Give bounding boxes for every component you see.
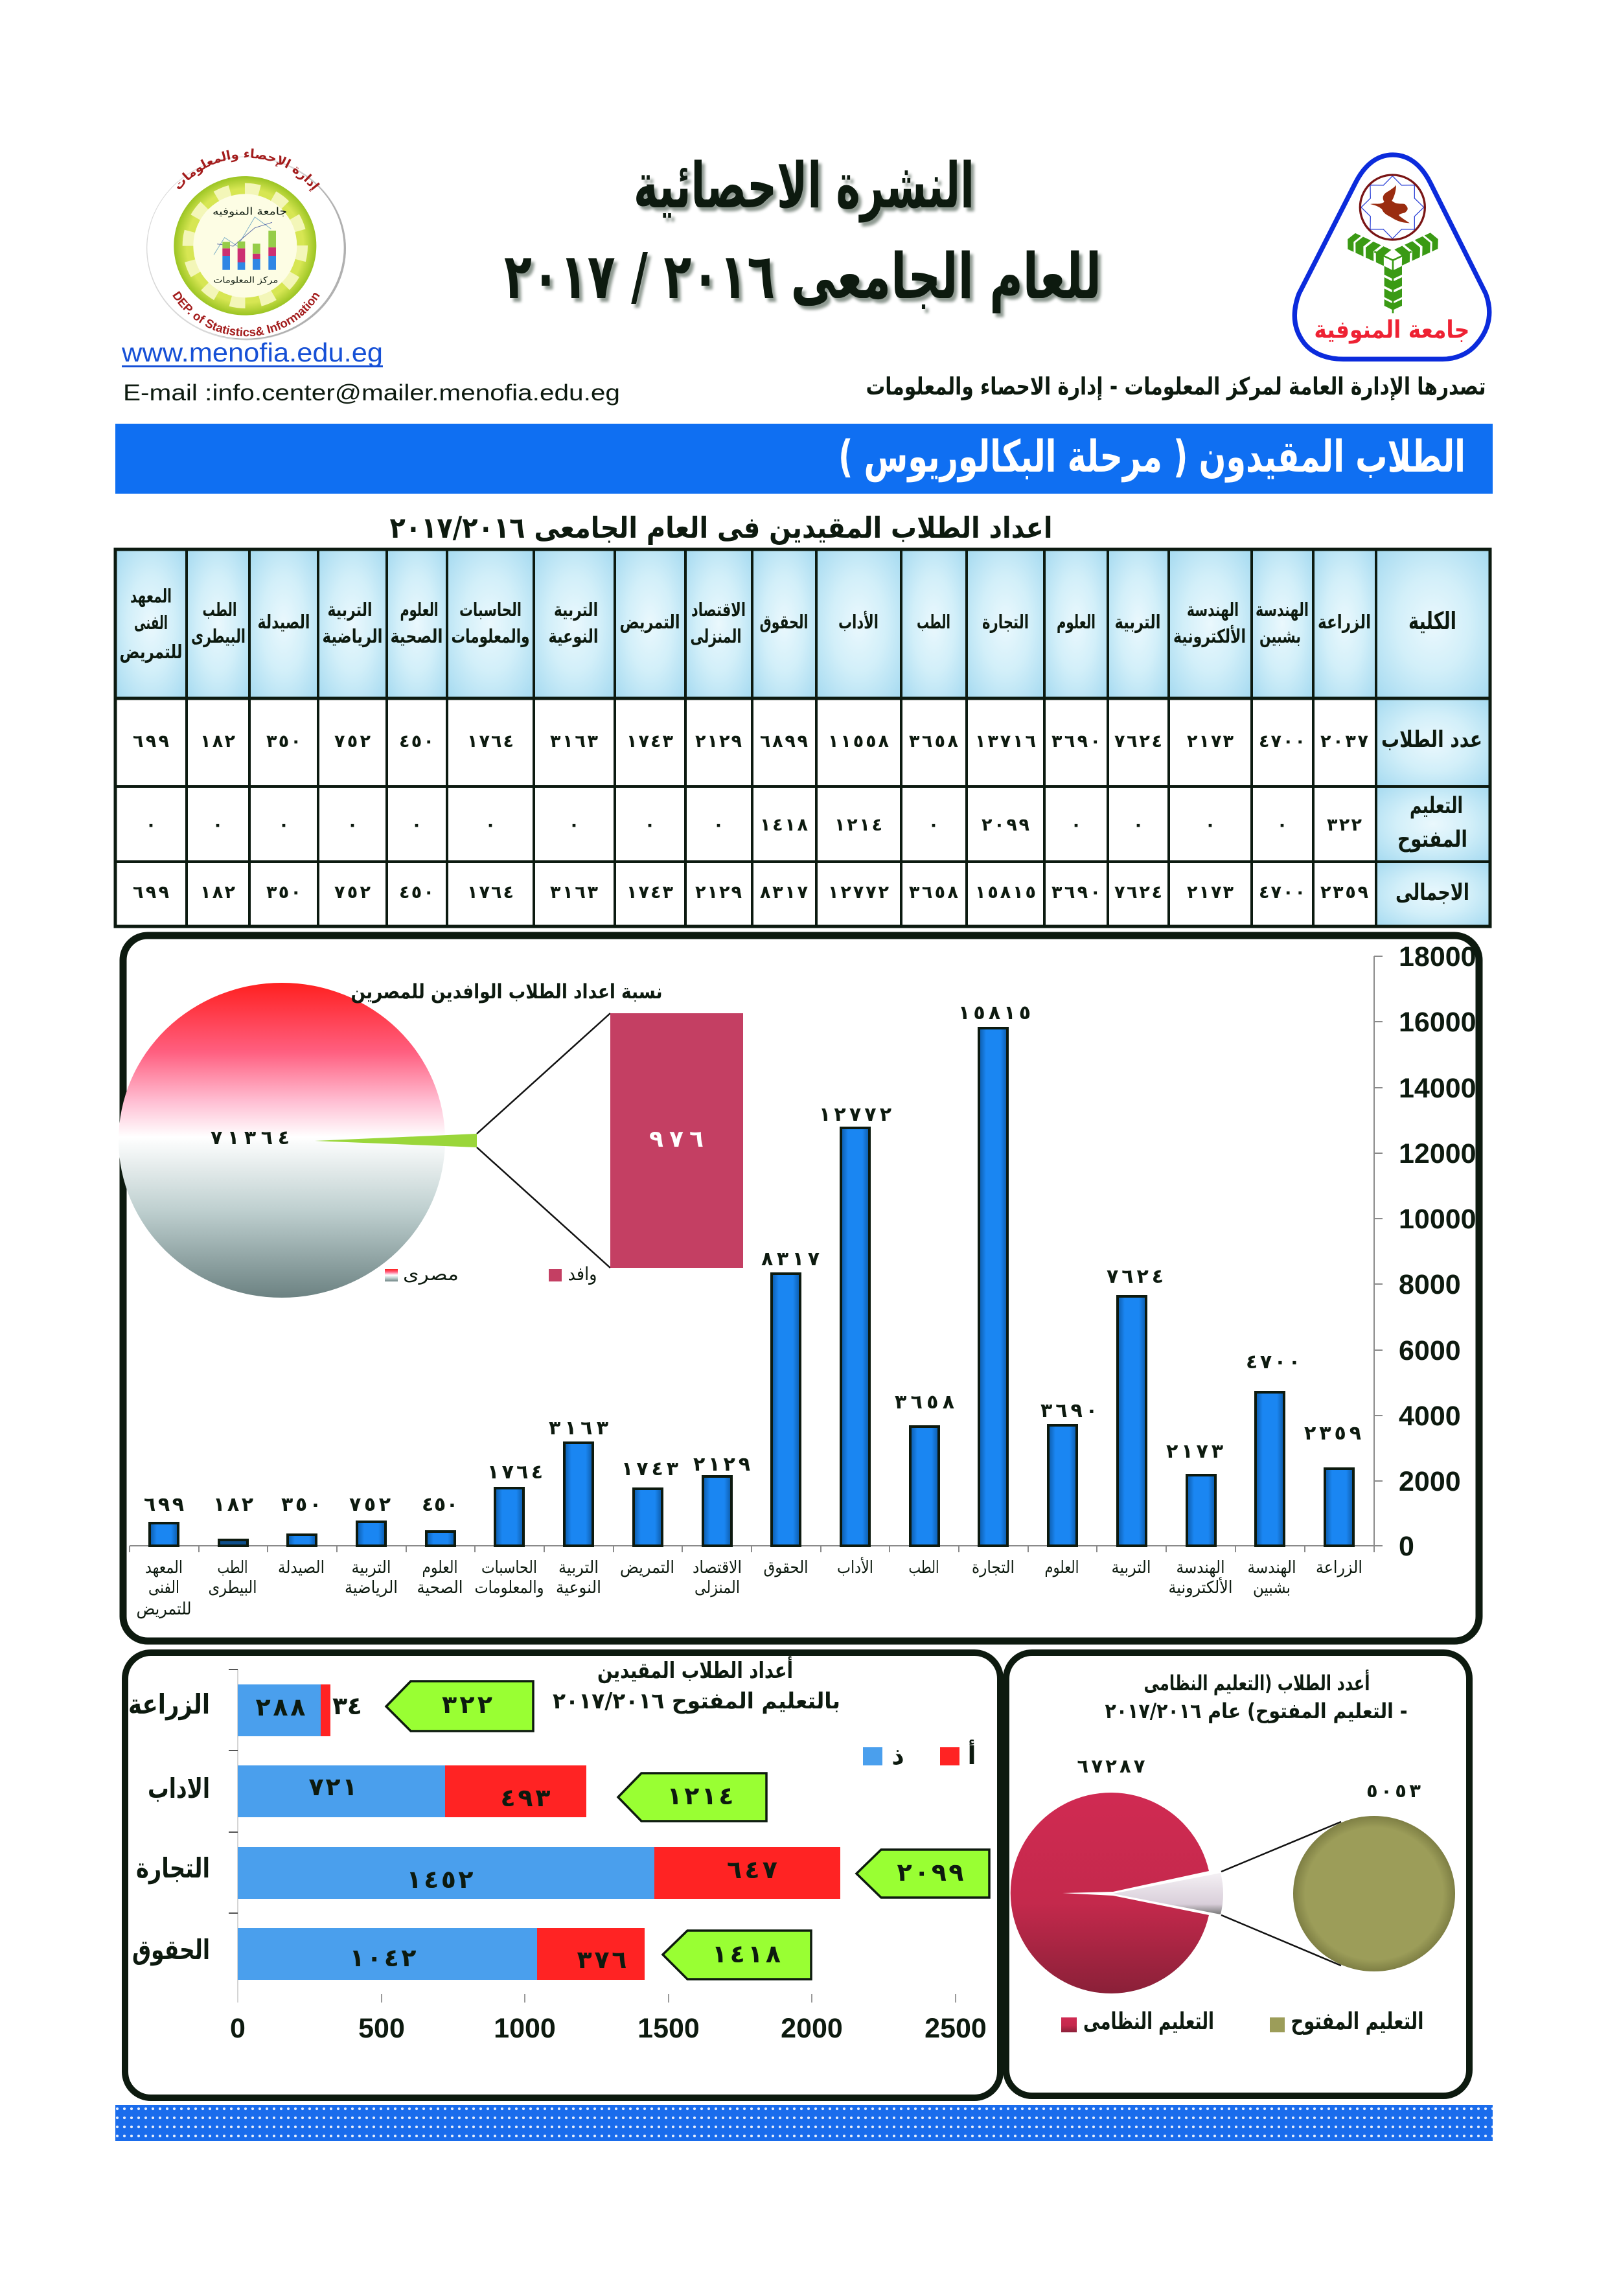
pie legend: التعليم المفتوح	[1291, 2008, 1424, 2035]
table row: regular students: ٣٦٩٠	[1051, 731, 1101, 752]
table row: regular students: ١٧٦٤	[467, 731, 514, 752]
x axis labels: 500	[358, 2013, 405, 2044]
table: enrolled students by faculty	[115, 549, 1490, 926]
bar chart: total by faculty	[130, 941, 1476, 1619]
y axis labels: 14000	[1399, 1073, 1476, 1104]
bar value labels: ٣٥٠	[281, 1493, 321, 1516]
faculty row labels: التجارة	[136, 1852, 210, 1884]
panel: total students bar chart and foreign students pie	[119, 936, 1479, 1641]
callout values: ٢٠٩٩	[897, 1858, 964, 1887]
logo: Menofia University emblem	[1294, 155, 1489, 359]
pie of pie chart: ٦٧٢٨٧	[1077, 1755, 1145, 1777]
table header labels: التجارة	[982, 611, 1029, 633]
table header labels: الصيدلة	[258, 611, 310, 633]
table row: totals: ٧٦٢٤	[1114, 882, 1162, 902]
table header labels: العلوم	[1057, 611, 1096, 633]
table row: regular students: ١٣٧١٦	[975, 731, 1036, 752]
x axis category labels: الصيدلة	[278, 1558, 325, 1578]
bar value labels: ٧٥٢	[349, 1493, 391, 1516]
bar value labels: ٤٥٠	[422, 1493, 458, 1516]
y axis labels	[1399, 941, 1476, 1562]
y axis labels: 6000	[1399, 1335, 1461, 1366]
x axis category labels: المنزلى	[695, 1578, 740, 1598]
x axis category labels: الهندسة	[1248, 1558, 1296, 1578]
x axis category labels: الحاسبات	[481, 1558, 537, 1578]
table row: totals	[133, 882, 1368, 902]
table row labels: التعليم	[1410, 793, 1463, 819]
faculty row labels: الاداب	[148, 1773, 210, 1804]
table row: regular students: ٦٨٩٩	[760, 731, 808, 752]
panel: open education stacked bars	[125, 1653, 1000, 2098]
table title: اعداد الطلاب المقيدين فى العام الجامعى ٢٠١٧/٢٠١٦	[390, 511, 1052, 545]
table row: open education: ١٤١٨	[760, 815, 809, 835]
pie chart: Egyptian vs foreign students: ٩٧٦	[649, 1126, 704, 1153]
logo: statistics department seal: DEP. of Statistics& Information	[172, 291, 320, 337]
table row: totals: ٣٦٥٨	[909, 882, 959, 902]
bar value labels: ٣١٦٣	[549, 1417, 608, 1440]
table row: regular students: ٤٥٠	[399, 731, 434, 752]
table row: regular students: ١٧٤٣	[626, 731, 674, 752]
table header labels: الكلية	[1408, 607, 1456, 635]
stacked bars	[238, 1684, 840, 1980]
table row: totals: ٢٣٥٩	[1320, 882, 1368, 902]
table header labels: التربية	[554, 599, 598, 621]
table row: totals: ٣٦٩٠	[1051, 882, 1101, 902]
table row: totals: ١٧٦٤	[467, 882, 514, 902]
table row: open education: ٠	[713, 815, 724, 835]
pie legend: وافد	[568, 1263, 597, 1285]
table header labels: التمريض	[619, 611, 680, 633]
x axis category labels: الزراعة	[1316, 1558, 1362, 1578]
pie of pie chart	[1011, 1755, 1455, 1993]
y axis labels: 16000	[1399, 1007, 1476, 1038]
x axis category labels: التربية	[1112, 1558, 1151, 1578]
table row labels: الاجمالى	[1396, 880, 1469, 906]
y axis labels: 0	[1399, 1531, 1414, 1562]
table row: open education: ٠	[1133, 815, 1143, 835]
x axis category labels: بشبين	[1253, 1578, 1291, 1598]
bar value labels: ٣٦٩٠	[1040, 1399, 1097, 1422]
y axis labels: 10000	[1399, 1204, 1476, 1235]
x axis category labels: الرياضية	[345, 1578, 398, 1598]
pie title: نسبة اعداد الطلاب الوافدين للمصرين	[351, 980, 662, 1004]
x axis category labels: التربية	[351, 1558, 391, 1578]
total callouts	[386, 1681, 989, 1979]
table header labels: العلوم	[400, 599, 438, 621]
x axis category labels: التربية	[558, 1558, 599, 1578]
table row: totals: ٣٥٠	[266, 882, 301, 902]
callout values	[442, 1690, 964, 1968]
table row: open education: ٠	[485, 815, 496, 835]
table row: open education: ٠	[928, 815, 939, 835]
table row: open education: ٠	[212, 815, 223, 835]
table header labels: الهندسة	[1187, 599, 1239, 621]
stacked bar value labels: ٣٤	[332, 1692, 362, 1720]
x axis labels: 1500	[637, 2013, 700, 2044]
table row: open education: ٠	[1277, 815, 1287, 835]
faculty row labels: الحقوق	[132, 1934, 210, 1966]
table header labels: والمعلومات	[451, 625, 530, 647]
table header labels: الأداب	[838, 610, 879, 633]
axes	[229, 1670, 956, 2003]
stacked bar value labels: ٧٢١	[308, 1773, 358, 1801]
stacked bar value labels: ٣٧٦	[577, 1946, 627, 1974]
table header labels: الرياضية	[323, 625, 382, 647]
pie legend	[385, 1263, 597, 1285]
x axis category labels: النوعية	[556, 1578, 601, 1598]
x axis labels: 0	[230, 2013, 246, 2044]
table row: regular students: ١١٥٥٨	[828, 731, 890, 752]
x axis labels: 2500	[925, 2013, 987, 2044]
table row labels: المفتوح	[1397, 827, 1467, 853]
pie title: - التعليم المفتوح) عام ٢٠١٧/٢٠١٦	[1105, 1699, 1407, 1723]
table row labels: عدد الطلاب	[1381, 727, 1482, 753]
bar value labels: ٢١٧٣	[1166, 1440, 1223, 1463]
table row labels	[1381, 727, 1482, 906]
x axis labels: 2000	[781, 2013, 843, 2044]
table header labels: بشبين	[1259, 625, 1301, 647]
x axis category labels: الحقوق	[763, 1558, 809, 1578]
title: academic year: للعام الجامعى ٢٠١٦ / ٢٠١٧	[504, 240, 1101, 314]
logo: statistics department seal: جامعة المنوفيه	[212, 205, 287, 218]
table header labels: الهندسة	[1256, 599, 1309, 621]
title: bulletin name: النشرة الاحصائية	[634, 149, 974, 223]
chart title: بالتعليم المفتوح ٢٠١٧/٢٠١٦	[553, 1688, 840, 1714]
x axis category labels: الطب	[218, 1558, 247, 1578]
pie legend	[1061, 2008, 1424, 2035]
bar value labels: ٣٦٥٨	[895, 1391, 954, 1414]
table row: totals: ٤٥٠	[399, 882, 434, 902]
table header labels: التربية	[1114, 611, 1161, 633]
table row: totals: ١٥٨١٥	[975, 882, 1036, 902]
table header labels: المعهد	[130, 585, 172, 607]
table row: regular students: ٧٥٢	[334, 731, 371, 752]
x axis category labels: للتمريض	[136, 1600, 192, 1619]
table row: regular students: ٧٦٢٤	[1114, 731, 1162, 752]
table row: open education: ٠	[146, 815, 156, 835]
email address: E-mail :info.center@mailer.menofia.edu.eg	[123, 380, 620, 406]
table row: open education: ٠	[1071, 815, 1081, 835]
table row: totals: ٤٧٠٠	[1259, 882, 1305, 902]
stacked bar value labels: ٦٤٧	[727, 1855, 777, 1884]
table row: regular students: ٢١٢٩	[695, 731, 742, 752]
footer dotted band	[115, 2105, 1493, 2141]
table row: open education	[146, 815, 1362, 835]
table row: open education: ٠	[569, 815, 579, 835]
y axis labels: 18000	[1399, 941, 1476, 972]
table header labels: الزراعة	[1318, 611, 1371, 633]
table row: open education: ١٢١٤	[834, 815, 882, 835]
section banner	[115, 424, 1493, 494]
x axis labels	[230, 2013, 987, 2044]
bar value labels: ٢١٢٩	[693, 1453, 750, 1476]
stacked bar value labels: ١٠٤٢	[350, 1944, 416, 1972]
table row: regular students: ٣٥٠	[266, 731, 301, 752]
table header labels: الاقتصاد	[691, 599, 746, 621]
faculty row labels	[128, 1688, 210, 1966]
stacked bar value labels: ٢٨٨	[255, 1693, 306, 1721]
table row: totals: ١٢٧٧٢	[828, 882, 890, 902]
x axis category labels	[136, 1556, 1362, 1619]
x axis category labels: العلوم	[422, 1558, 457, 1578]
x axis category labels: الصحية	[417, 1578, 463, 1598]
y axis labels: 12000	[1399, 1138, 1476, 1169]
bar value labels: ١٧٦٤	[487, 1461, 543, 1484]
x axis category labels: الأداب	[837, 1556, 873, 1578]
table row: totals: ٨٣١٧	[760, 882, 809, 902]
table header labels: الطب	[917, 611, 950, 633]
chart title: أعداد الطلاب المقيدين	[597, 1656, 793, 1684]
table header labels: النوعية	[548, 625, 599, 647]
logo: statistics department seal: مركز المعلومات	[213, 276, 278, 286]
x axis category labels: الاقتصاد	[693, 1558, 742, 1578]
x axis category labels: الطب	[908, 1558, 939, 1578]
callout values: ١٢١٤	[667, 1782, 733, 1810]
stacked bar value labels	[255, 1692, 777, 1974]
x axis labels: 1000	[494, 2013, 556, 2044]
x axis category labels: البيطرى	[209, 1578, 257, 1598]
table row: totals: ٣١٦٣	[550, 882, 599, 902]
table header labels: الحقوق	[759, 611, 809, 633]
table row: open education: ٢٠٩٩	[982, 815, 1029, 835]
table row: open education: ٠	[645, 815, 655, 835]
table header labels: الفنى	[134, 612, 168, 634]
panel: regular vs open education pie	[1006, 1653, 1469, 2096]
y axis labels: 8000	[1399, 1269, 1461, 1300]
bar value labels: ١٧٤٣	[621, 1458, 678, 1480]
bar value labels: ٦٩٩	[144, 1493, 184, 1516]
y axis labels: 4000	[1399, 1401, 1461, 1432]
table row: open education: ٠	[1205, 815, 1215, 835]
stacked bar value labels: ١٤٥٢	[407, 1865, 473, 1894]
table row: open education: ٠	[411, 815, 422, 835]
pie legend: مصرى	[403, 1263, 459, 1285]
table header labels: الصحية	[390, 625, 443, 647]
table row: totals: ٢١٧٣	[1187, 882, 1234, 902]
x axis category labels: التجارة	[972, 1558, 1015, 1578]
table row: open education: ٣٢٢	[1327, 815, 1362, 835]
table row: open education: ٠	[279, 815, 289, 835]
x axis category labels: التمريض	[620, 1558, 674, 1578]
table row: regular students: ٣١٦٣	[550, 731, 599, 752]
bars	[150, 1028, 1353, 1546]
logo: Menofia University emblem: جامعة المنوفية	[1314, 316, 1469, 344]
gender legend	[863, 1739, 976, 1770]
x axis category labels: المعهد	[145, 1558, 183, 1578]
x axis category labels: العلوم	[1044, 1558, 1079, 1578]
logo: statistics department seal: إدارة الإحصاء والمعلومات	[177, 148, 320, 192]
callout values: ١٤١٨	[712, 1940, 781, 1968]
faculty row labels: الزراعة	[128, 1688, 210, 1721]
table row: regular students: ٦٩٩	[133, 731, 169, 752]
pie title: أعدد الطلاب (التعليم النظامى	[1144, 1670, 1370, 1695]
gender legend: ذ	[891, 1741, 904, 1770]
table header labels: البيطرى	[191, 625, 246, 647]
table header labels: التربية	[328, 599, 372, 621]
table row: regular students: ٤٧٠٠	[1259, 731, 1305, 752]
x axis category labels: الفنى	[148, 1578, 179, 1598]
table header labels: المنزلى	[691, 625, 741, 647]
table row: regular students	[133, 731, 1369, 752]
table header labels: الألكترونية	[1173, 625, 1246, 647]
bar value labels: ٤٧٠٠	[1246, 1351, 1300, 1373]
table header labels: الحاسبات	[459, 599, 522, 621]
bar value labels: ٢٣٥٩	[1304, 1422, 1361, 1445]
table row: totals: ١٨٢	[200, 882, 236, 902]
table header labels: للتمريض	[119, 641, 183, 663]
callout values: ٣٢٢	[442, 1690, 492, 1719]
stacked bar value labels: ٤٩٣	[500, 1784, 551, 1812]
bar value labels: ٨٣١٧	[761, 1248, 820, 1270]
x axis category labels: والمعلومات	[474, 1578, 544, 1598]
website link: www.menofia.edu.eg	[121, 338, 383, 367]
table row: regular students: ٣٦٥٨	[909, 731, 959, 752]
bar value labels: ٧٦٢٤	[1107, 1265, 1164, 1288]
table row: regular students: ١٨٢	[200, 731, 236, 752]
gender legend: أ	[967, 1739, 976, 1770]
pie of pie chart: ٥٠٥٣	[1366, 1780, 1421, 1802]
table row: regular students: ٢١٧٣	[1187, 731, 1234, 752]
bar value labels: ١٥٨١٥	[958, 1002, 1031, 1024]
table row: totals: ٢١٢٩	[695, 882, 742, 902]
pie chart: Egyptian vs foreign students: ٧١٣٦٤	[211, 1127, 290, 1149]
bar value labels: ١٨٢	[213, 1493, 253, 1516]
table row: totals: ٦٩٩	[133, 882, 169, 902]
pie chart: Egyptian vs foreign students	[119, 980, 743, 1298]
bar value labels: ١٢٧٧٢	[819, 1103, 891, 1126]
table row: regular students: ٢٠٣٧	[1320, 731, 1369, 752]
table header labels	[119, 585, 1456, 663]
table header labels: الطب	[202, 599, 237, 621]
pie legend: التعليم النظامى	[1083, 2008, 1214, 2035]
y axis labels: 2000	[1399, 1466, 1461, 1497]
x axis category labels: الهندسة	[1177, 1558, 1224, 1578]
table row: open education: ٠	[347, 815, 358, 835]
table row: totals: ١٧٤٣	[626, 882, 674, 902]
chart title	[553, 1656, 840, 1714]
table row: totals: ٧٥٢	[334, 882, 371, 902]
x axis category labels: الألكترونية	[1169, 1576, 1232, 1598]
logo: statistics department seal	[146, 148, 346, 341]
bar value labels	[144, 1002, 1361, 1516]
pie title	[1105, 1670, 1407, 1723]
